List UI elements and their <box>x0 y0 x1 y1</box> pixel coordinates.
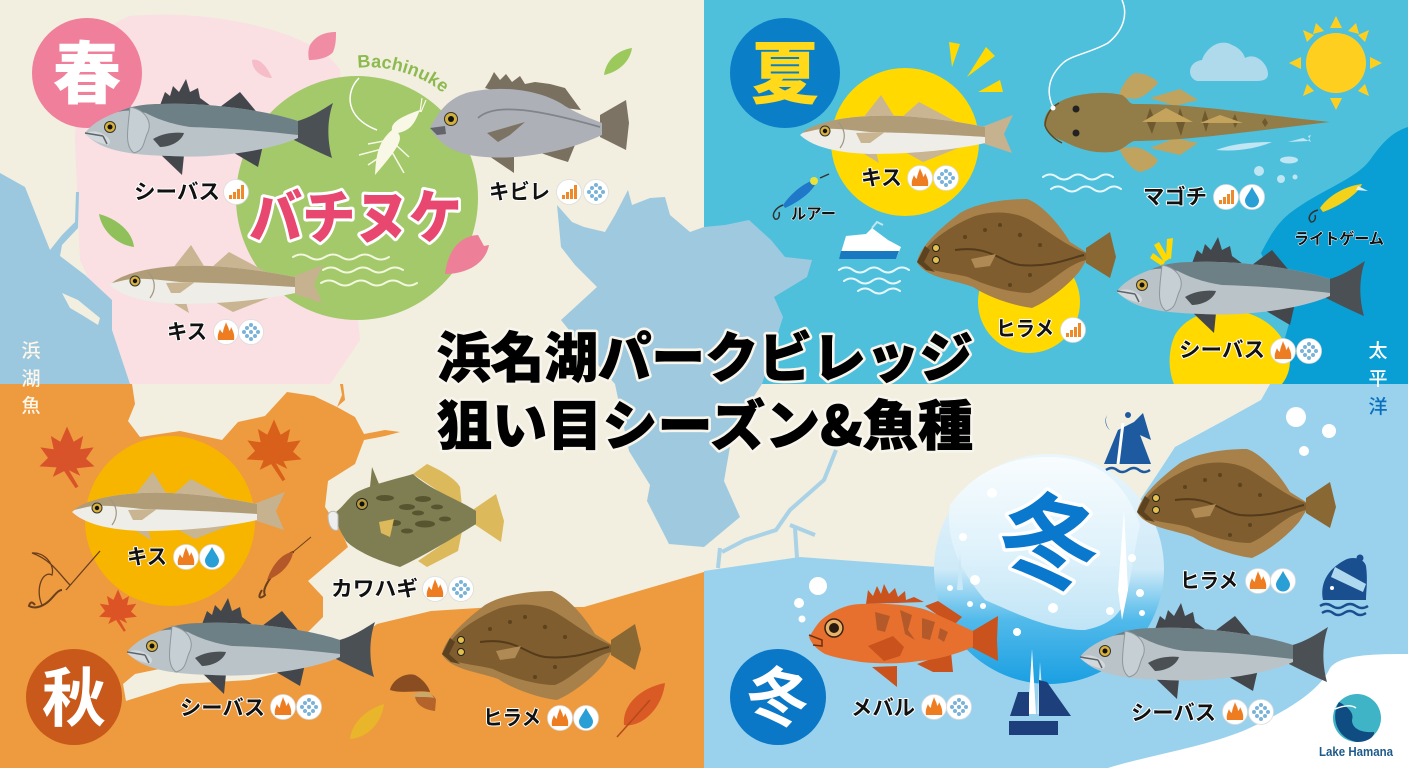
label: mebaru <box>851 694 972 720</box>
fish: kisu <box>800 95 1013 163</box>
season badge: 夏 <box>730 18 840 128</box>
text: Bachinuke: Bachinuke <box>358 55 447 92</box>
background: pink spring blob <box>75 15 360 384</box>
label: kibire: キビレ <box>489 181 550 204</box>
background: autumn land upper-left <box>128 384 342 440</box>
panel: winter <box>730 407 1394 759</box>
label: kawahagi <box>331 576 474 602</box>
side text: 太平洋 <box>1368 340 1388 418</box>
side text: 浜湖魚: 湖 <box>21 368 41 390</box>
side text: 太平洋: 平 <box>1368 369 1388 390</box>
background: summer sea <box>704 0 1408 384</box>
icon: whale tail splash <box>1104 412 1151 472</box>
background: autumn land right <box>123 384 704 701</box>
bubble: ice sphere <box>934 454 1164 684</box>
background: winter sea <box>704 384 1408 768</box>
label: hirame <box>996 318 1086 342</box>
background: winter land <box>704 384 1270 571</box>
yellow circle: seabass <box>1170 310 1290 384</box>
label: seabass <box>1131 700 1274 725</box>
waves <box>839 174 1121 294</box>
title <box>437 314 973 461</box>
fish: hirame <box>1137 449 1336 558</box>
map: winter river <box>718 450 836 568</box>
label: hirame <box>483 706 598 730</box>
icon: acorns <box>390 674 436 711</box>
label: magochi <box>1143 184 1264 210</box>
icon: buoy <box>1320 554 1368 615</box>
label: kawahagi: カワハギ <box>331 578 418 601</box>
side text: 浜湖魚 <box>21 340 41 417</box>
rays <box>949 42 1003 92</box>
season badge: 春: 春 <box>53 37 121 113</box>
season badge: 冬: 冬 <box>740 658 815 739</box>
yellow circle: hirame <box>978 251 1080 353</box>
label: hirame <box>1180 568 1296 594</box>
background: autumn <box>0 384 704 768</box>
fish: magochi <box>1044 73 1330 172</box>
fish: mebaru <box>809 584 998 687</box>
icon: boat <box>839 222 901 259</box>
label: seabass: シーバス <box>134 181 220 204</box>
season badge: 冬 <box>730 649 826 745</box>
label: seabass: シーバス <box>1131 702 1216 725</box>
bachinuke green circle <box>236 76 478 320</box>
map: western water <box>0 173 130 384</box>
panel: spring <box>32 18 632 345</box>
fish: kibire <box>430 72 629 173</box>
decoration: bubbles <box>794 407 1336 622</box>
icon: sun <box>1289 16 1382 110</box>
label: seabass <box>1179 338 1322 364</box>
yellow circle: kisu <box>831 68 979 216</box>
icon: yellow lure <box>1309 184 1368 222</box>
label: kisu <box>167 320 264 344</box>
icon: sailboat <box>1009 649 1071 735</box>
fish: hirame <box>442 591 641 700</box>
icon: yellow leaf <box>350 704 384 739</box>
season badge: 夏: 夏 <box>751 37 819 113</box>
label: magochi: マゴチ <box>1143 185 1207 209</box>
title: 狙い目シーズン&魚種 <box>437 382 973 461</box>
label: hirame: ヒラメ <box>483 707 541 730</box>
fish: seabass <box>85 79 333 175</box>
text: バチヌケ: バチヌケ <box>249 186 462 251</box>
season badge: 秋 <box>26 649 122 745</box>
side text: 太平洋: 洋 <box>1368 396 1388 418</box>
decoration: water motes <box>1216 135 1311 183</box>
fish: seabass <box>1080 603 1328 699</box>
fish: kawahagi <box>328 464 504 567</box>
label: kisu: キス <box>167 321 207 344</box>
logo: Lake Hamana: Lake Hamana <box>1319 745 1394 759</box>
side text: 浜湖魚: 魚 <box>21 395 41 417</box>
background: spring land <box>0 0 704 384</box>
icon: shrimp <box>350 78 426 175</box>
icon: worm lure <box>259 537 311 597</box>
map: central lake Hamana <box>557 190 812 547</box>
yellow circle: kisu <box>85 436 255 606</box>
fish: kisu <box>72 472 285 540</box>
text: 冬 big: 冬 <box>989 479 1110 609</box>
season badge: 春 <box>32 18 142 128</box>
label: seabass: シーバス <box>1179 339 1265 362</box>
icon: blue lure <box>773 174 829 219</box>
icon: fishing hook and line <box>29 551 100 607</box>
label: kisu <box>861 166 958 190</box>
label: kisu: キス <box>127 546 167 569</box>
label: lure: ルアー <box>791 206 836 223</box>
panel: summer <box>730 0 1384 384</box>
fish: kisu <box>110 245 323 313</box>
label: light game: ライトゲーム <box>1294 229 1384 248</box>
decoration: petals and leaves <box>99 32 632 274</box>
side text: 浜湖魚: 浜 <box>21 340 41 362</box>
logo: Lake Hamana <box>1319 694 1394 759</box>
title: 浜名湖パークビレッジ <box>437 314 973 393</box>
title: 狙い目シーズン&魚種 <box>437 382 973 461</box>
label: hirame: ヒラメ <box>1180 570 1238 593</box>
fish: hirame <box>917 199 1116 308</box>
label: kisu: キス <box>861 167 902 190</box>
icon: red leaf <box>617 683 665 737</box>
background: summer deep sea <box>1261 127 1408 384</box>
fishing line <box>1049 0 1125 107</box>
side text: 太平洋: 太 <box>1368 340 1388 362</box>
icon: maple leaves <box>39 420 302 632</box>
label: mebaru: メバル <box>851 697 915 720</box>
background: white corner <box>1108 654 1408 768</box>
rays <box>1150 238 1173 266</box>
label: seabass: シーバス <box>180 697 265 720</box>
label: hirame: ヒラメ <box>996 318 1054 341</box>
label: kibire <box>489 180 608 204</box>
icon: cloud <box>1190 43 1268 81</box>
fish: seabass <box>127 598 375 694</box>
label: seabass <box>134 180 248 204</box>
map: island <box>62 293 100 325</box>
title: 浜名湖パークビレッジ <box>437 314 973 393</box>
fish: seabass <box>1117 237 1365 333</box>
label: kisu <box>127 544 224 570</box>
season badge: 秋: 秋 <box>42 663 106 735</box>
waves <box>293 254 417 286</box>
label: seabass <box>180 694 322 720</box>
panel: autumn <box>26 420 665 745</box>
